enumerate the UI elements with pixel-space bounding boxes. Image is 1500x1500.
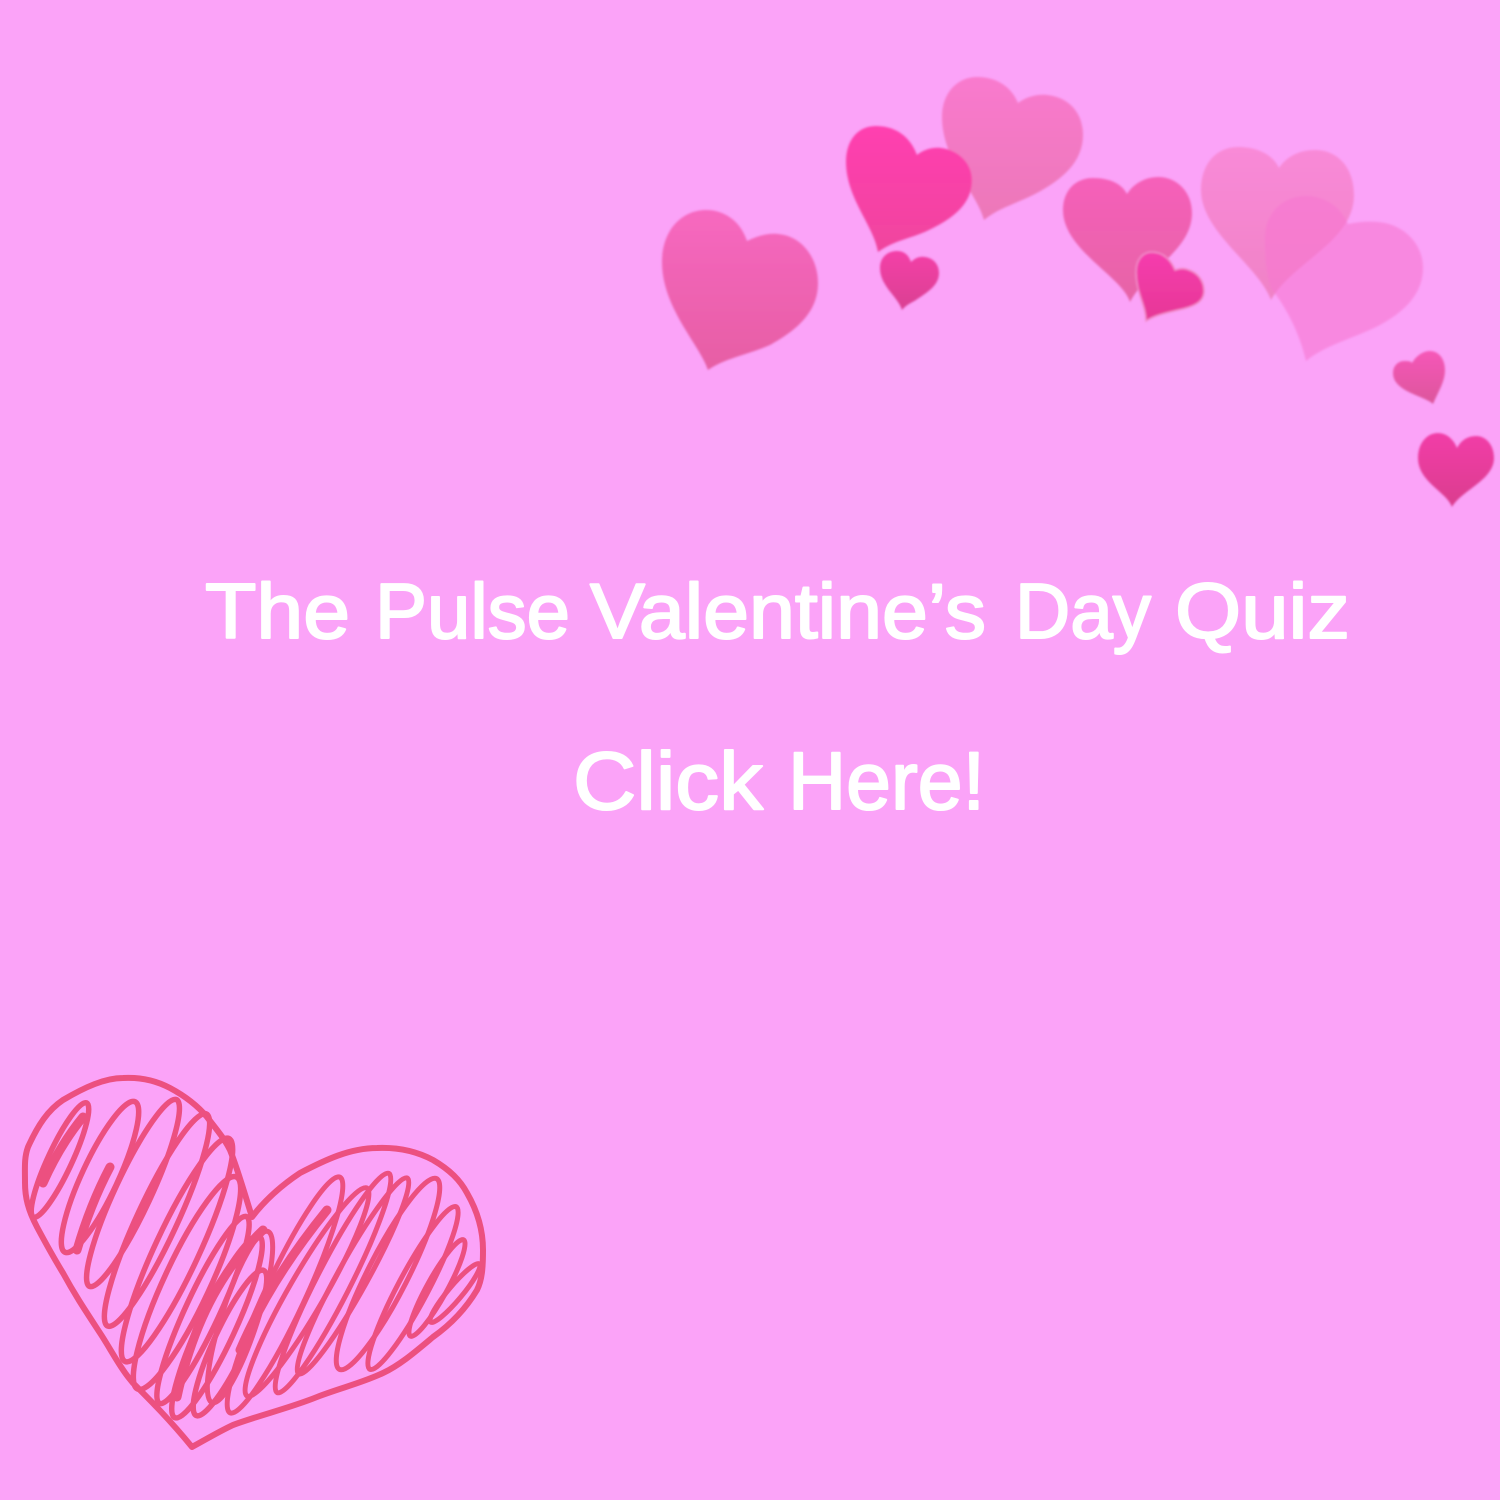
call to action: Here! <box>788 736 985 827</box>
icon: scribbled heart <box>22 1078 485 1447</box>
icon: pale heart, right <box>1201 147 1354 300</box>
title: Valentine’s <box>590 567 986 655</box>
icon: pale heart, top centre <box>942 77 1083 220</box>
icon: tiny heart, right <box>1393 351 1445 404</box>
title: Day <box>1015 567 1151 655</box>
heart outline <box>25 1078 483 1447</box>
left lobe scribble <box>22 1092 278 1425</box>
icon: small heart under hot pink heart <box>880 251 939 310</box>
icon: small heart, bottom right <box>1418 433 1494 507</box>
title: Quiz <box>1175 567 1350 655</box>
title: The <box>205 567 350 655</box>
icon: medium heart, centre right <box>1063 177 1192 302</box>
icon: large heart, far left <box>662 210 818 370</box>
heavy scribble strokes <box>43 1117 327 1397</box>
floating hearts cluster <box>662 77 1494 507</box>
icon: hot pink heart <box>846 126 972 252</box>
icon: small heart overlapping medium heart <box>1136 252 1204 321</box>
title: Pulse <box>375 567 570 655</box>
right lobe scribble <box>195 1166 485 1421</box>
icon: pale heart, far right overlapping <box>1265 196 1423 361</box>
call to action: Click <box>573 736 764 827</box>
